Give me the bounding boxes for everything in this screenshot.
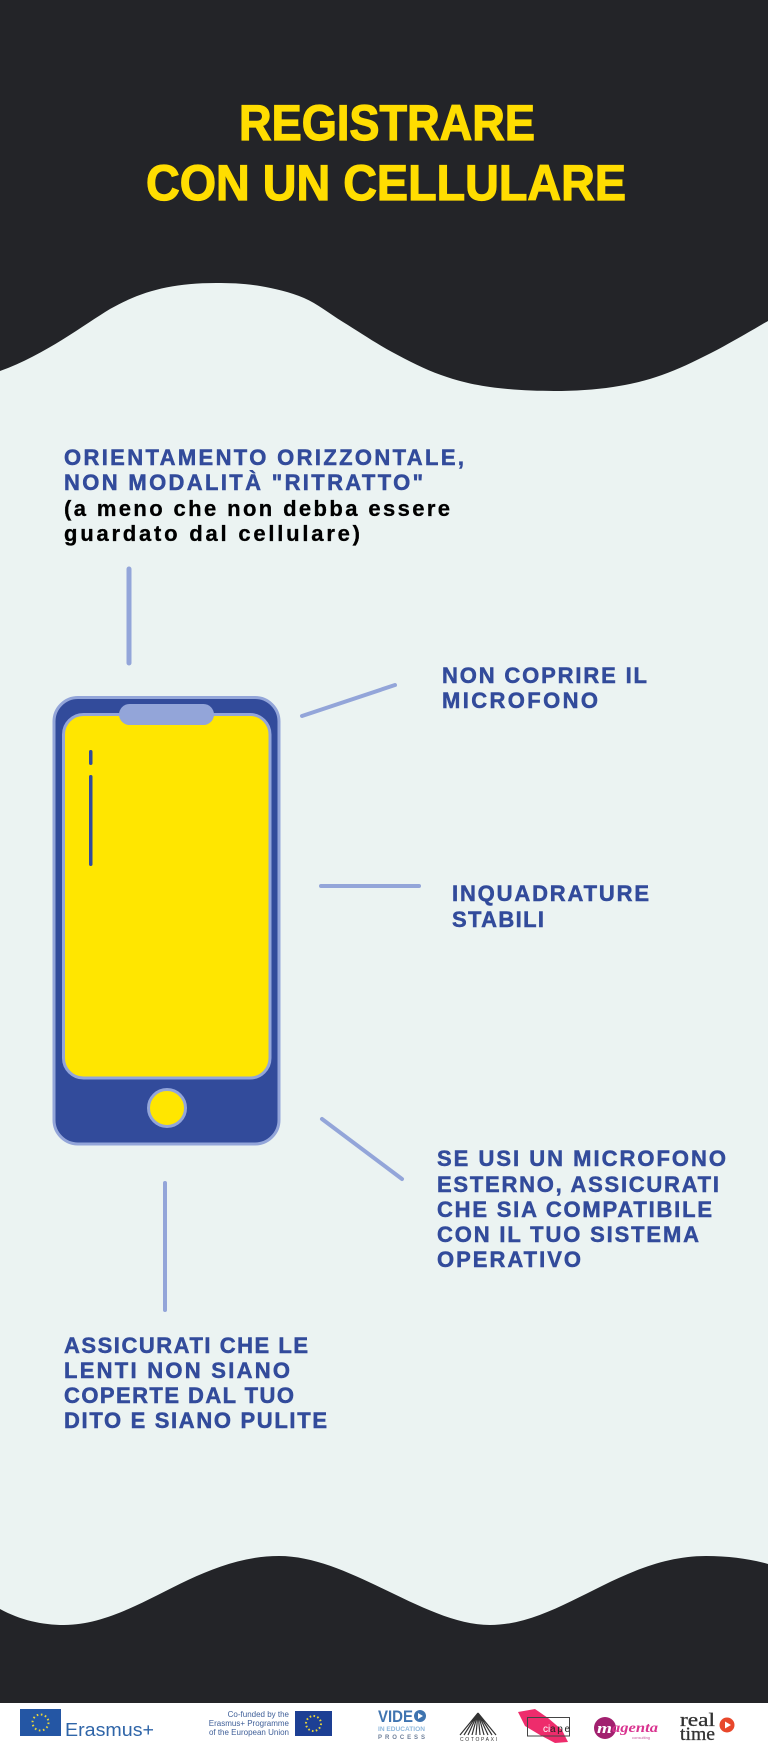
logo: co-funded by the Erasmus+ Programme: of the European Union [209,1728,289,1737]
text block: external microphone: SE USI UN MICROFONO [437,1146,726,1171]
logo: Cotopaxi: COTOPAXI [460,1737,497,1743]
title [146,95,626,211]
text block: orientation [64,445,464,546]
logo: Magenta [594,1717,658,1740]
logo: Video in Education Process [378,1707,426,1741]
text block: orientation: guardato dal cellulare) [64,521,360,546]
text block: lenses: DITO E SIANO PULITE [64,1408,327,1433]
logo: ciape: ci [543,1724,550,1735]
phone side button short [89,750,92,765]
text block: lenses [64,1333,327,1433]
text block: microphone [442,663,647,713]
connector line: external microphone [322,1119,402,1179]
logo: ciape [518,1709,570,1743]
header dark wave panel [0,0,768,391]
logo: co-funded by the Erasmus+ Programme: Erasmus+ Programme [209,1719,290,1728]
logo: Magenta: consulting [632,1735,650,1740]
logo: ciape: ape [550,1724,570,1735]
phone screen [64,714,270,1078]
logo: real time: time [680,1724,715,1745]
logo: co-funded by the Erasmus+ Programme: Co-funded by the [228,1710,290,1719]
text block: external microphone: CON IL TUO SISTEMA [437,1222,699,1247]
connector line: orientation [126,569,132,663]
logo: Video in Education Process: IN EDUCATION [378,1726,425,1733]
logo: co-funded by the Erasmus+ Programme [209,1710,332,1737]
text block: stable shots: INQUADRATURE [452,881,649,906]
text block: microphone: NON COPRIRE IL [442,663,647,688]
logo: Video in Education Process: VIDE [378,1707,413,1726]
phone notch [119,704,214,725]
footer logo band [0,1703,768,1745]
title: CON UN CELLULARE [146,155,626,211]
text block: lenses: COPERTE DAL TUO [64,1383,294,1408]
text block: external microphone: OPERATIVO [437,1247,581,1272]
logo: Magenta: agenta [612,1721,658,1736]
connector line: stable shots [321,884,419,888]
logo: Erasmus+ [20,1709,154,1740]
text block: orientation: ORIENTAMENTO ORIZZONTALE, [64,445,464,470]
phone home button [148,1090,186,1126]
text block: orientation: NON MODALITÀ "RITRATTO" [64,470,423,495]
logo: Erasmus+: Erasmus+ [65,1720,154,1740]
text block: microphone: MICROFONO [442,688,598,713]
text block: lenses: LENTI NON SIANO [64,1358,290,1383]
text block: external microphone: ESTERNO, ASSICURATI [437,1172,719,1197]
logo: real time: real [680,1710,715,1731]
text block: lenses: ASSICURATI CHE LE [64,1333,308,1358]
text block: orientation: (a meno che non debba essere [64,496,450,521]
logo: real time [680,1710,734,1745]
icon: smartphone [54,698,279,1144]
footer dark wave panel [0,1556,768,1703]
text block: external microphone [437,1146,726,1272]
text block: stable shots: STABILI [452,907,544,932]
phone body [54,698,279,1144]
phone side button long [89,775,92,866]
text block: external microphone: CHE SIA COMPATIBILE [437,1197,712,1222]
logo: Cotopaxi [460,1713,497,1743]
logo: Video in Education Process: PROCESS [378,1735,425,1741]
connector line: microphone [302,685,395,716]
connector line: lenses [163,1183,167,1310]
title: REGISTRARE [239,95,535,151]
logo: Magenta: m [597,1721,612,1737]
text block: stable shots [452,881,649,932]
